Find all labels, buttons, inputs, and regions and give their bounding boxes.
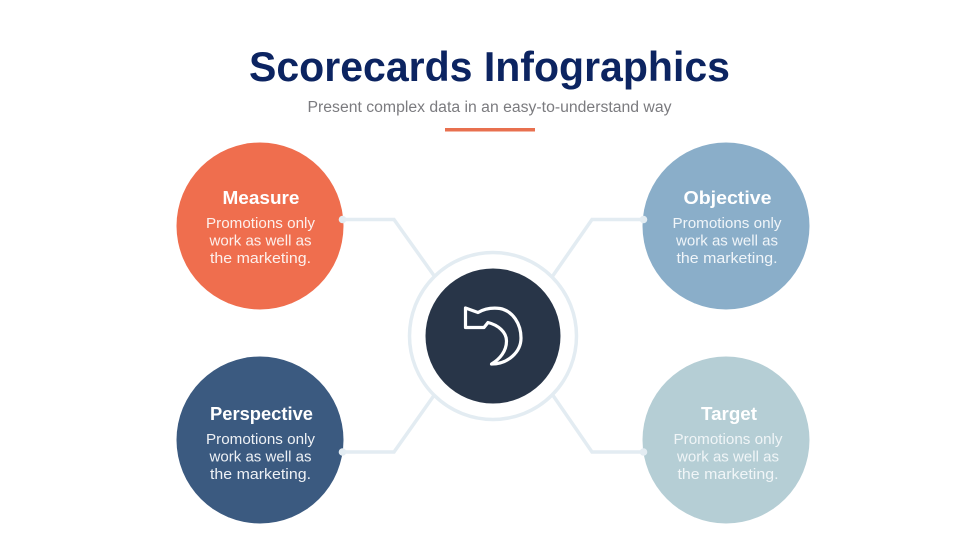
- body text: target: the marketing.: [678, 467, 778, 483]
- body text: objective: the marketing.: [676, 251, 778, 267]
- connector dot: perspective: [339, 448, 346, 456]
- body text: objective: Promotions only: [672, 216, 782, 232]
- central hub: [410, 252, 576, 420]
- body text: objective: [672, 216, 782, 267]
- body text: measure: [206, 216, 316, 267]
- body text: perspective: Promotions only: [206, 432, 316, 448]
- body text: target: work as well as: [676, 450, 779, 466]
- connector dot: measure: [339, 216, 346, 223]
- body text: measure: the marketing.: [210, 251, 311, 267]
- icon: return arrow: [466, 308, 521, 364]
- heading: perspective: Perspective: [210, 403, 313, 424]
- connector dot: target: [640, 448, 647, 456]
- heading: measure: Measure: [222, 187, 300, 208]
- panel: perspective: [176, 356, 344, 524]
- subtitle: Present complex data in an easy-to-understand way: [308, 99, 672, 116]
- panel: objective: [642, 142, 810, 310]
- accent underline: [445, 128, 535, 132]
- connector: perspective to hub: [343, 394, 435, 452]
- body text: perspective: the marketing.: [210, 467, 311, 483]
- body text: perspective: [206, 432, 316, 483]
- connector: target to hub: [552, 394, 643, 452]
- panel: target: [642, 356, 810, 524]
- body text: measure: Promotions only: [206, 216, 316, 232]
- connector dot: objective: [640, 216, 647, 223]
- connector: measure to hub: [343, 220, 435, 277]
- body text: target: [674, 432, 783, 483]
- panel: measure: [176, 142, 344, 310]
- connector: objective to hub: [552, 220, 643, 277]
- body text: objective: work as well as: [675, 234, 778, 250]
- body text: measure: work as well as: [208, 234, 312, 250]
- heading: objective: Objective: [684, 187, 772, 208]
- title: Scorecards Infographics: [249, 43, 730, 90]
- body text: perspective: work as well as: [208, 450, 312, 466]
- body text: target: Promotions only: [674, 432, 783, 448]
- heading: target: Target: [701, 403, 757, 424]
